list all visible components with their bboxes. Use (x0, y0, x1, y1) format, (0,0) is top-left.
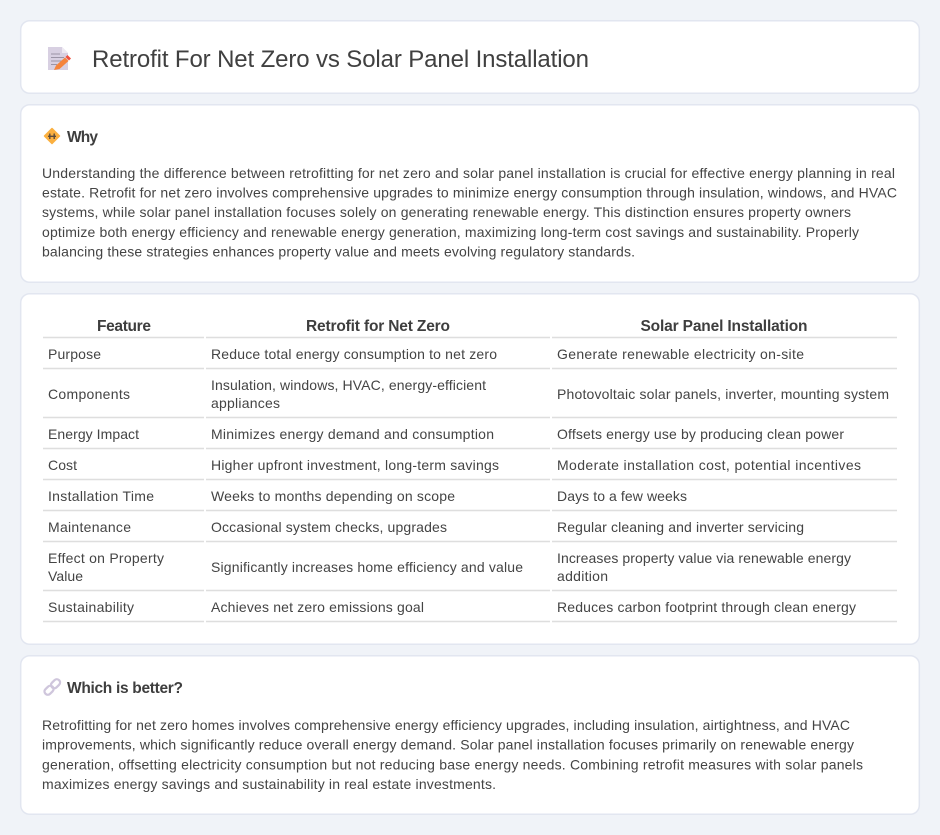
row: installation time (48, 488, 687, 504)
text block: why (42, 165, 897, 260)
row: sustainability: Achieves net zero emissions goal (211, 599, 424, 615)
row: purpose: Generate renewable electricity on-site (557, 346, 804, 362)
row: effect on property value: Value (48, 568, 83, 584)
row: installation time: Weeks to months depending on scope (211, 488, 455, 504)
row: energy impact: Minimizes energy demand and consumption (211, 426, 494, 442)
row: components: Insulation, windows, HVAC, energy-efficient (211, 377, 486, 393)
text block: which is better: improvements, which significantly reduce overall energy demand. Solar panel installation focuses primarily on renewable energy (42, 736, 854, 752)
heading: which is better: Which is better? (67, 680, 183, 697)
row: cost (48, 457, 861, 473)
row: effect on property value: Effect on Property (48, 550, 164, 566)
text block: why: balancing these strategies enhances property value and meets evolving regulatory standards. (42, 244, 635, 260)
row: effect on property value: addition (557, 568, 608, 584)
icon: document with pencil (48, 47, 71, 70)
text block: which is better: maximizes energy savings and sustainability in real estate investments. (42, 776, 496, 792)
row: purpose (48, 346, 804, 362)
row: sustainability: Reduces carbon footprint through clean energy (557, 599, 856, 615)
row: cost: Higher upfront investment, long-term savings (211, 457, 499, 473)
row: effect on property value (48, 550, 851, 584)
panel: comparison table (21, 294, 919, 644)
icon: chain link (43, 678, 61, 696)
text block: why: Understanding the difference between retrofitting for net zero and solar panel installation is crucial for effective energy planning in real (42, 165, 895, 181)
table header row: Retrofit for Net Zero (306, 318, 450, 335)
row: energy impact: Energy Impact (48, 426, 139, 442)
row: maintenance: Occasional system checks, upgrades (211, 519, 447, 535)
text block: why: optimize both energy efficiency and renewable energy generation, maximizing long-term cost savings and sustainability. Properly (42, 224, 859, 240)
panel: why (21, 105, 919, 282)
row: maintenance: Maintenance (48, 519, 131, 535)
row: cost: Moderate installation cost, potential incentives (557, 457, 861, 473)
row: effect on property value: Increases property value via renewable energy (557, 550, 851, 566)
row: components: Components (48, 386, 130, 402)
table header row: Solar Panel Installation (640, 318, 808, 335)
title: Retrofit For Net Zero vs Solar Panel Installation (92, 46, 589, 73)
row: maintenance: Regular cleaning and inverter servicing (557, 519, 804, 535)
row: cost: Cost (48, 457, 77, 473)
row: purpose: Purpose (48, 346, 101, 362)
text block: which is better (42, 717, 863, 792)
text block: why: estate. Retrofit for net zero involves comprehensive upgrades to minimize energy consumption through insulation, windows, and HVAC (42, 184, 897, 200)
table header row (97, 318, 808, 335)
row: sustainability: Sustainability (48, 599, 134, 615)
row: components: Photovoltaic solar panels, inverter, mounting system (557, 386, 889, 402)
row: installation time: Days to a few weeks (557, 488, 687, 504)
panel: header (21, 21, 919, 93)
row: energy impact: Offsets energy use by producing clean power (557, 426, 844, 442)
row: purpose: Reduce total energy consumption to net zero (211, 346, 497, 362)
panel: which is better (21, 656, 919, 814)
row: sustainability (48, 599, 856, 615)
row: components (48, 377, 889, 411)
text block: why: systems, while solar panel installation focuses solely on generating renewable energy. This distinction ensures property owners (42, 204, 851, 220)
icon: diamond road sign (44, 128, 60, 144)
table header row: Feature (97, 318, 151, 335)
row: effect on property value: Significantly increases home efficiency and value (211, 559, 523, 575)
heading: why: Why (67, 129, 98, 146)
text block: which is better: Retrofitting for net zero homes involves comprehensive energy efficiency upgrades, including insulation, airtightness, and HVAC (42, 717, 850, 733)
row: energy impact (48, 426, 844, 442)
row: maintenance (48, 519, 804, 535)
text block: which is better: generation, offsetting electricity consumption but not reducing base energy needs. Combining retrofit measures with solar panels (42, 756, 863, 772)
row: installation time: Installation Time (48, 488, 154, 504)
row: components: appliances (211, 395, 280, 411)
